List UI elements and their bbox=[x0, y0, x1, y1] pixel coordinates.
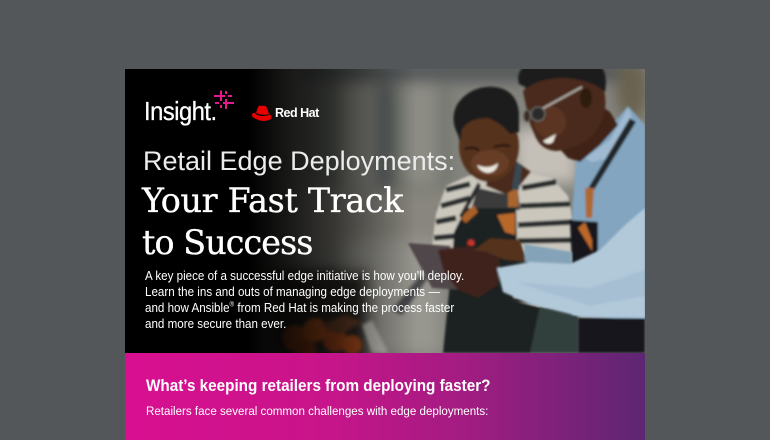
neck bbox=[486, 160, 531, 194]
head bbox=[459, 110, 519, 182]
logo wordmark: Red Hat bbox=[275, 106, 319, 120]
text block: intro: Learn the ins and outs of managing edge deployments — bbox=[145, 284, 440, 299]
apron pockets bbox=[497, 213, 515, 235]
woman bbox=[432, 87, 578, 353]
glasses bbox=[540, 87, 582, 110]
left black fade bbox=[125, 69, 645, 353]
logo: Insight bbox=[144, 90, 234, 126]
head bbox=[523, 74, 606, 151]
icon: Insight mark bbox=[214, 90, 234, 109]
icon: red hat bbox=[252, 106, 272, 121]
shirt bbox=[572, 106, 645, 320]
upper hand bbox=[474, 238, 526, 262]
hair bbox=[454, 87, 519, 142]
tablet and hands bbox=[408, 208, 645, 318]
title: Your Fast Track bbox=[142, 181, 403, 220]
cuff bbox=[524, 244, 572, 266]
panel: hero photo bbox=[125, 69, 645, 353]
text block: intro: A key piece of a successful edge initiative is how you’ll deploy. bbox=[145, 268, 464, 283]
t-shirt neckline bbox=[470, 180, 520, 212]
logo wordmark: Insight. bbox=[144, 96, 217, 126]
heading: subtitle: Retail Edge Deployments: bbox=[143, 146, 455, 176]
text block: intro: and more secure than ever. bbox=[145, 316, 286, 331]
text block: Retailers face several common challenges with edge deployments: bbox=[146, 404, 488, 418]
oranges bbox=[282, 272, 432, 361]
photo background bbox=[125, 60, 648, 361]
man's apron bbox=[570, 220, 598, 266]
man bbox=[518, 66, 645, 353]
apron bbox=[443, 208, 578, 353]
panel: challenges banner bbox=[125, 353, 645, 440]
neck bbox=[556, 100, 618, 162]
lower hand bbox=[438, 246, 500, 298]
title: to Success bbox=[142, 223, 312, 262]
text block: intro: and how Ansible® from Red Hat is making the process faster bbox=[145, 300, 454, 315]
forearm bbox=[497, 208, 645, 318]
heading: What’s keeping retailers from deploying faster? bbox=[146, 377, 490, 395]
striped shirt bbox=[432, 170, 574, 262]
lower stripes bbox=[483, 285, 548, 308]
text block: intro bbox=[145, 268, 464, 331]
apron strap bbox=[587, 118, 636, 190]
straps bbox=[512, 163, 522, 190]
title bbox=[141, 181, 404, 262]
logo: Red Hat bbox=[252, 106, 320, 121]
hair bbox=[518, 66, 606, 92]
